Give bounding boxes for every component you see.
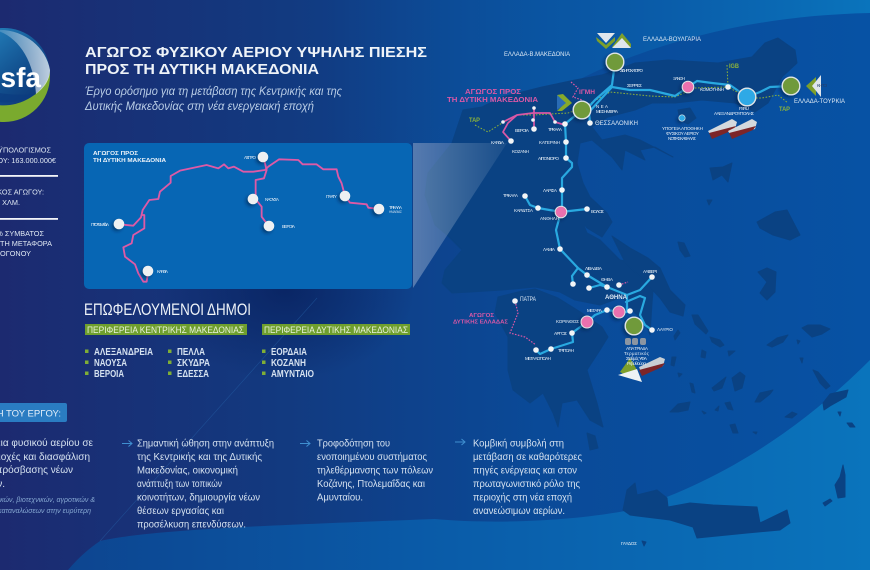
text block: benefit 4: περιοχής στη νέα εποχή xyxy=(473,492,572,504)
map labels: ΑΓΩΓΟΣ ΠΡΟΣ xyxy=(465,89,521,96)
list: western Macedonia municipalities: ΚΟΖΑΝΗ xyxy=(271,358,306,369)
text block: benefit 4: πρωταγωνιστικό ρόλο της xyxy=(473,478,580,490)
map labels: ΚΑΡΔΙΤΣΑ xyxy=(514,208,534,213)
map labels: ΒΕΡΟΙΑ xyxy=(515,128,530,133)
map labels: ΚΟΖΑΝΗ xyxy=(512,149,529,154)
map: land of Greece xyxy=(425,38,855,546)
title xyxy=(85,45,427,78)
map labels: ΛΑΜΙΑ xyxy=(543,247,556,252)
list: western Macedonia municipalities: ΑΜΥΝΤΑΙΟ xyxy=(271,369,314,380)
title: ΠΡΟΣ ΤΗ ΔΥΤΙΚΗ ΜΑΚΕΔΟΝΙΑ xyxy=(85,62,320,78)
pipeline: main national gas network xyxy=(525,62,791,354)
panel: project stats xyxy=(0,146,58,258)
map labels: ΣΕΡΡΕΣ xyxy=(627,83,642,88)
map labels: Ρεβυθούσα xyxy=(627,360,646,366)
map labels: ΘΗΒΑ xyxy=(601,277,614,282)
map labels: ΑΡΓΟΣ xyxy=(554,331,567,336)
map labels: ΥΠΟΓΕΙΑ ΑΠΟΘΗΚΗ xyxy=(662,126,703,131)
map labels: TAP xyxy=(779,106,790,113)
map labels: ΤΗ ΔΥΤΙΚΗ ΜΑΚΕΔΟΝΙΑ xyxy=(447,97,538,104)
list: western Macedonia municipalities: ΕΟΡΔΑΙΑ xyxy=(271,347,307,358)
map labels: ΓΑΥΔΟΣ xyxy=(621,541,637,546)
route stations xyxy=(114,152,384,276)
map labels: ΙΓΜΗ xyxy=(579,89,596,96)
map labels: TAP xyxy=(469,117,480,124)
subtitle: Δυτικής Μακεδονίας στη νέα ενεργειακή εποχή xyxy=(84,99,314,113)
text block: benefit 2: Μακεδονίας, οικονομική xyxy=(137,464,238,476)
map labels: ΠΑΤΡΑ xyxy=(520,296,537,303)
text block: benefit 2: θέσεων εργασίας και xyxy=(137,505,224,517)
text block: benefit 3: Κοζάνης, Πτολεμαΐδας και xyxy=(317,478,425,490)
map labels: ΔΥΤΙΚΗΣ ΕΛΛΑΔΑΣ xyxy=(453,320,509,326)
text block: benefit 4 xyxy=(455,438,582,517)
text block: benefit 3: Αμυνταίου. xyxy=(317,492,363,504)
map labels: ΦΥΣΙΚΟΥ ΑΕΡΙΟΥ xyxy=(666,131,699,136)
pipeline: dashed existing TAP and IGB lines xyxy=(475,65,788,132)
list: central Macedonia municipalities: ΠΕΛΛΑ xyxy=(177,347,205,358)
text block: benefit 3: ενοποιημένου συστήματος xyxy=(317,451,427,463)
text block: benefit 4: πηγές ενέργειας και στον xyxy=(473,464,577,476)
map labels: ΒΟΛΟΣ xyxy=(591,209,604,214)
map labels xyxy=(447,36,846,546)
map labels: ΛΑΥΡΙΟ xyxy=(657,327,673,332)
map labels: ΞΑΝΘΗ xyxy=(673,76,685,81)
station labels: ΗΜΑΘΙΑΣ xyxy=(389,210,402,214)
list: central Macedonia municipalities: ΝΑΟΥΣΑ xyxy=(94,358,127,369)
map labels: Σταθμός ΥΦΑ xyxy=(626,355,648,361)
station labels: ΠΤΟΛΕΜΑΪΔΑ xyxy=(91,221,110,227)
text block: benefit 4: ανανεώσιμων αερίων. xyxy=(473,505,565,517)
icon: LNG ships xyxy=(639,119,757,376)
list: western Macedonia municipalities xyxy=(262,347,314,380)
tag: project significance xyxy=(0,403,67,422)
station labels: ΒΕΡΟΙΑ xyxy=(282,224,296,229)
map labels: ΤΡΙΚΑΛΑ xyxy=(548,127,563,132)
text block: benefit 3: Τροφοδότηση του xyxy=(317,438,390,450)
map labels: FSRU xyxy=(739,106,749,111)
text block: benefit 4: Κομβική συμβολή στη xyxy=(473,438,564,450)
map labels: ΣΙΔΗΡΟΚΑΣΤΡΟ xyxy=(620,68,643,73)
text block: benefit 3 xyxy=(300,438,433,504)
text block: benefit 3: τηλεθέρμανσης των πόλεων xyxy=(317,464,433,476)
map labels: ΕΛΛΑΔΑ-ΤΟΥΡΚΙΑ xyxy=(794,98,846,105)
panel: pipeline detail map xyxy=(84,143,412,289)
map labels: ΜΕΣΗΜΒΡΙΑ xyxy=(596,109,619,114)
text block: benefit 1 xyxy=(0,437,95,515)
pipeline: western Greece and IGMI dashed lines xyxy=(510,82,628,345)
map labels: ΤΡΙΚΑΛΑ xyxy=(503,193,519,198)
map labels: ΑΘΗΝΑ xyxy=(605,294,628,301)
map labels: ΚΟΜΟΤΗΝΗ xyxy=(700,87,724,92)
map labels: ΜΕΓΑΛΟΠΟΛΗ xyxy=(525,356,551,361)
map labels: ΤΡΙΠΟΛΗ xyxy=(558,348,574,353)
list: central Macedonia municipalities: ΑΛΕΞΑΝΔΡΕΙΑ xyxy=(94,347,153,358)
map labels: ΝΕΑ xyxy=(596,104,609,109)
map labels: ΑΓΙΑ ΤΡΙΑΔΑ xyxy=(626,346,649,351)
icon: border arrows xyxy=(557,33,821,382)
map labels: ΛΙΒΑΔΕΙΑ xyxy=(585,266,603,271)
icon: arrow xyxy=(300,440,310,446)
station labels: ΤΡΙΚΑΛΑ xyxy=(389,205,403,210)
map labels: ΛΑΡΙΣΑ xyxy=(543,188,558,193)
station labels: ΝΑΟΥΣΑ xyxy=(265,197,280,202)
map labels: ΑΙΓΙΟΝΙΟΡΟ xyxy=(538,156,559,161)
text block: benefit 2 xyxy=(122,438,274,530)
map hubs: green, pink and blue stations xyxy=(555,53,800,335)
spotlight from detail panel xyxy=(413,143,507,288)
station labels: ΠΛΑΤΥ xyxy=(326,194,337,199)
icon: arrow xyxy=(122,440,132,446)
map labels: ΚΗΠΟΙ xyxy=(817,83,827,88)
panel heading xyxy=(93,151,166,164)
badge: central Macedonia: ΠΕΡΙΦΕΡΕΙΑ ΚΕΝΤΡΙΚΗΣ ΜΑΚΕΔΟΝΙΑΣ xyxy=(87,325,245,335)
list: central Macedonia municipalities: ΒΕΡΟΙΑ xyxy=(94,369,124,380)
map labels: ΑΓΩΓΟΣ xyxy=(469,313,495,319)
badge: western Macedonia: ΠΕΡΙΦΕΡΕΙΑ ΔΥΤΙΚΗΣ ΜΑΚΕΔΟΝΙΑΣ xyxy=(264,325,409,335)
map labels: ΑΛΙΒΕΡΙ xyxy=(643,269,657,274)
text block: benefit 2: προσέλκυση επενδύσεων. xyxy=(137,518,246,530)
map labels: ΑΛΕΞΑΝΔΡΟΥΠΟΛΗΣ xyxy=(714,111,754,116)
text block: benefit 1: καταναλώσεων στην ευρύτερη xyxy=(0,507,91,515)
station labels xyxy=(91,155,403,274)
map labels: IGB xyxy=(729,63,739,70)
map labels: ΚΑΤΕΡΙΝΗ xyxy=(539,140,560,145)
text block: benefit 2: κοινοτήτων, δημιουργία νέων xyxy=(137,492,260,504)
text block: benefit 2: της Κεντρικής και της Δυτικής xyxy=(137,451,262,463)
panel heading: ΑΓΩΓΟΣ ΠΡΟΣ xyxy=(93,151,139,157)
map labels: ΚΑΡΔΙΑ xyxy=(491,140,505,145)
station labels: ΚΑΡΔΙΑ xyxy=(157,269,169,274)
heading: benefiting municipalities: ΕΠΩΦΕΛΟΥΜΕΝΟΙ ΔΗΜΟΙ xyxy=(84,301,251,319)
subtitle xyxy=(84,84,342,113)
map labels: ΕΛΛΑΔΑ-ΒΟΥΛΓΑΡΙΑ xyxy=(643,36,702,43)
icon: arrow xyxy=(455,439,465,445)
map labels: ΘΕΣΣΑΛΟΝΙΚΗ xyxy=(595,120,638,127)
map labels: Τερματικός xyxy=(624,350,650,356)
text block: benefit 4: μετάβαση σε καθαρότερες xyxy=(473,451,582,463)
text block: benefit 2: ανάπτυξη των τοπικών xyxy=(137,478,222,490)
text block: benefit 2: Σημαντική ώθηση στην ανάπτυξη xyxy=(137,438,274,450)
map labels: ΑΝΘΗΛΗ xyxy=(540,216,559,221)
station labels: ΑΣΠΡΟ xyxy=(244,155,256,160)
list: central Macedonia municipalities: ΣΚΥΔΡΑ xyxy=(177,358,210,369)
list: central Macedonia municipalities: ΕΔΕΣΣΑ xyxy=(177,369,209,380)
logo: esfa xyxy=(0,28,50,122)
list: central Macedonia municipalities xyxy=(85,347,210,380)
subtitle: Έργο ορόσημο για τη μετάβαση της Κεντρικής και της xyxy=(85,84,342,98)
panel heading: ΤΗ ΔΥΤΙΚΗ ΜΑΚΕΔΟΝΙΑ xyxy=(93,158,166,164)
map labels: ΜΕΓΑΡΑ xyxy=(587,308,603,313)
map labels: ΚΟΡΙΝΘΟΣ xyxy=(556,319,579,324)
map labels: ΕΛΛΑΔΑ-Β.ΜΑΚΕΔΟΝΙΑ xyxy=(504,51,571,58)
title: ΑΓΩΓΟΣ ΦΥΣΙΚΟΥ ΑΕΡΙΟΥ ΥΨΗΛΗΣ ΠΙΕΣΗΣ xyxy=(85,45,427,61)
map labels: ΝΟΤΙΑΣ ΚΑΒΑΛΑΣ xyxy=(668,136,696,141)
icon: Revithoussa LNG tanks xyxy=(625,338,646,345)
pipeline: western Macedonia project xyxy=(503,108,565,141)
pipeline route xyxy=(119,157,379,282)
map nodes xyxy=(501,84,731,353)
